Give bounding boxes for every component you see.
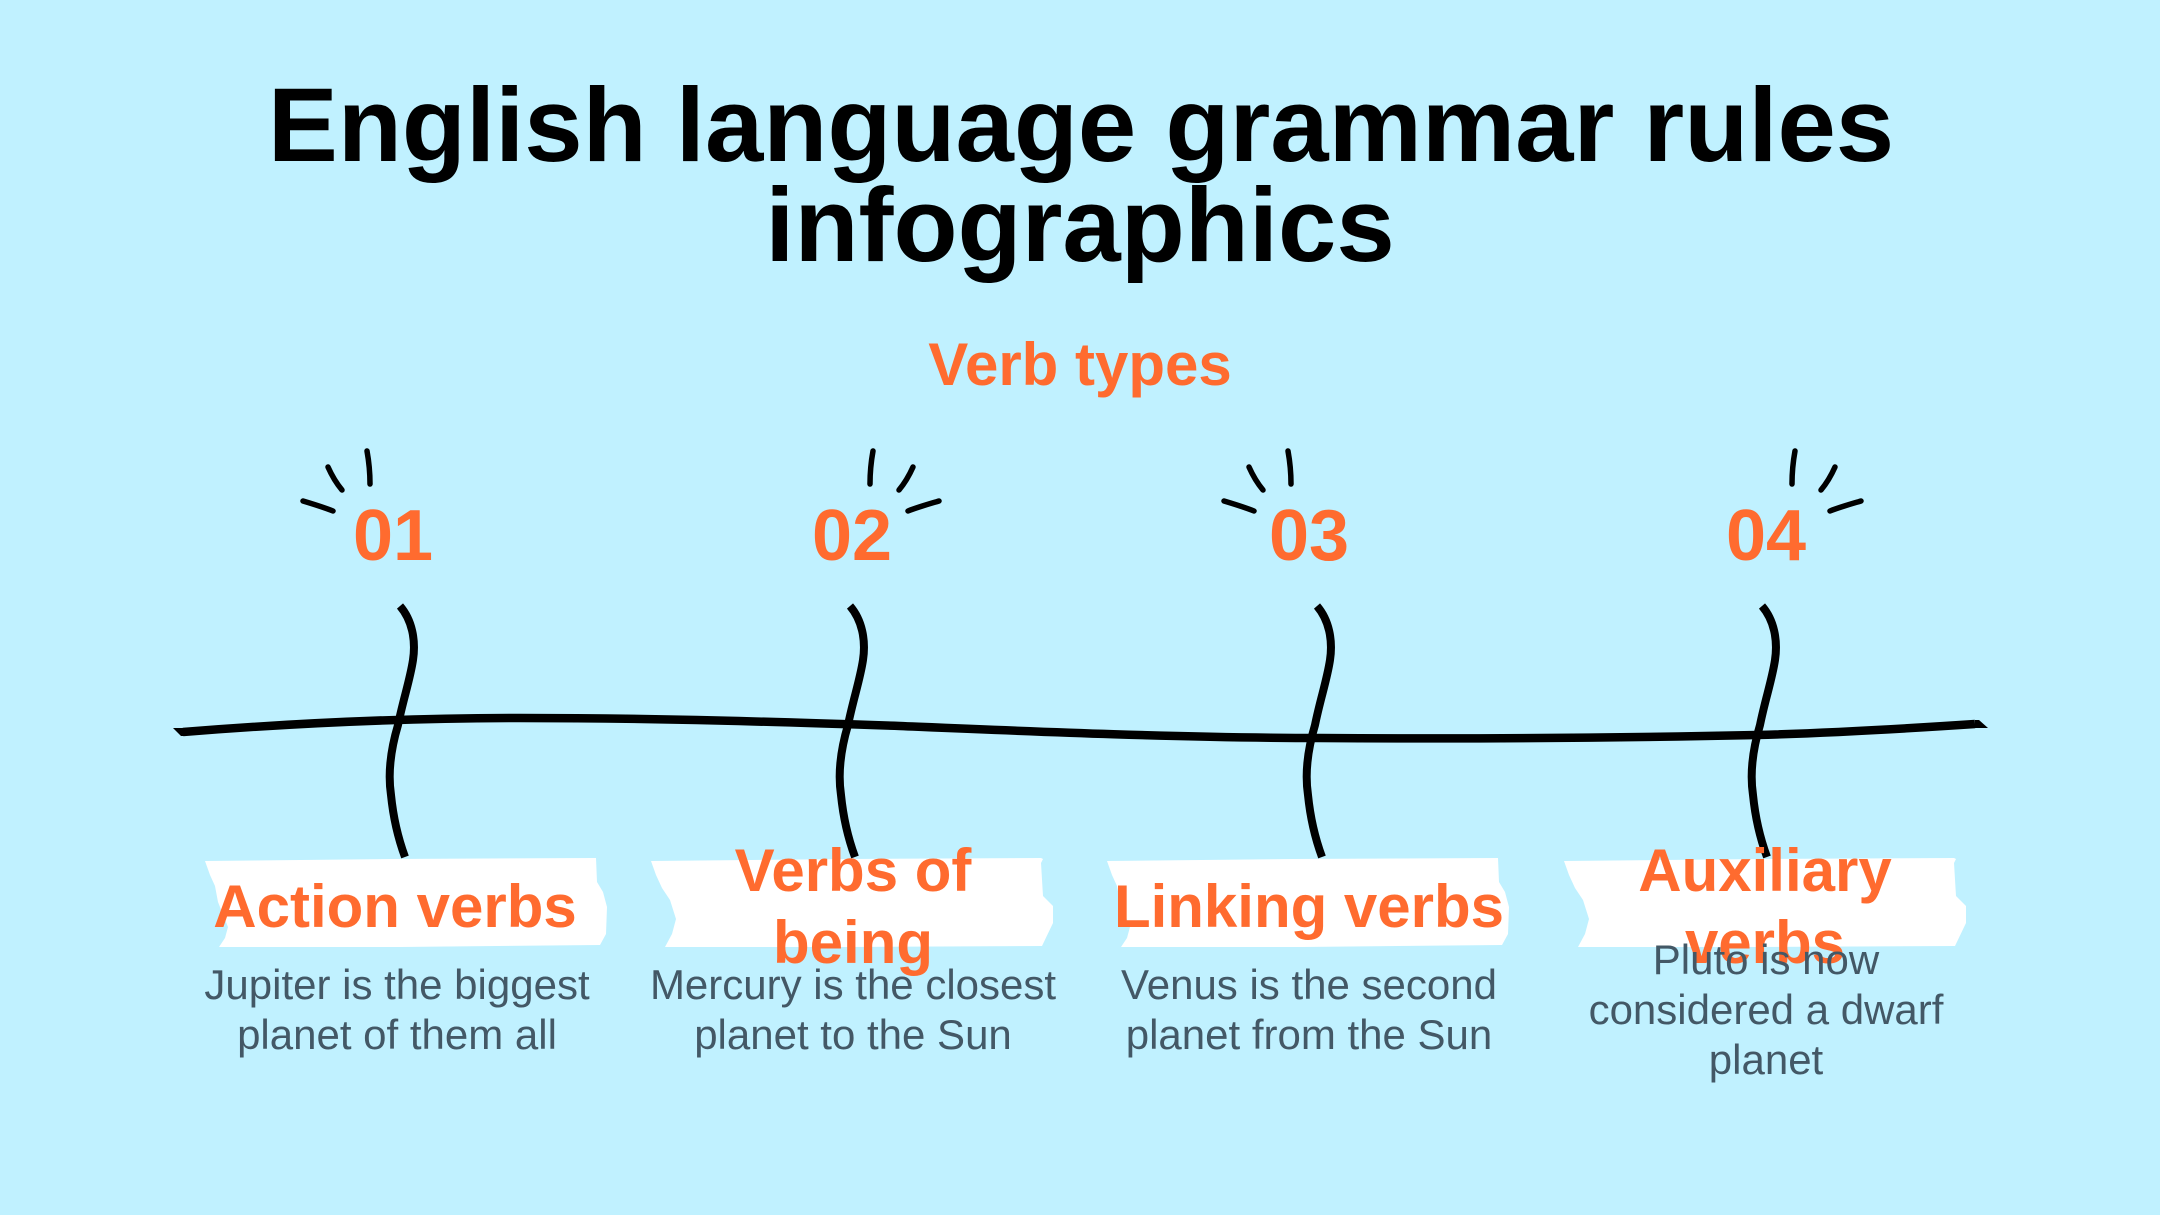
number 04: 04 — [1726, 496, 1806, 576]
number 03: 03 — [1269, 496, 1349, 576]
connector 1 — [390, 606, 414, 857]
description 1 — [204, 961, 590, 1058]
description 2: Mercury is the closest — [650, 961, 1056, 1008]
title: English language grammar rules — [268, 67, 1894, 184]
connector 2 — [840, 606, 864, 857]
heading: verbs of being — [735, 837, 972, 976]
spark lines 4 — [1792, 451, 1861, 511]
connector 4 — [1752, 606, 1776, 857]
spark lines 2 — [870, 451, 939, 511]
spark lines 1 — [303, 451, 370, 511]
description 1: Jupiter is the biggest — [204, 961, 590, 1008]
title: infographics — [765, 167, 1395, 284]
description 3 — [1121, 961, 1497, 1058]
description 4: planet — [1709, 1036, 1824, 1083]
description 4: considered a dwarf — [1589, 986, 1944, 1033]
heading: linking verbs: Linking verbs — [1114, 873, 1504, 940]
heading: auxiliary verbs: verbs — [1685, 909, 1845, 976]
heading: verbs of being: being — [773, 909, 933, 976]
column 2: verbs of being — [650, 451, 1056, 1058]
column 3: linking verbs — [1107, 451, 1509, 1058]
description 2: planet to the Sun — [694, 1011, 1012, 1058]
heading: verbs of being: Verbs of — [735, 837, 972, 904]
column 4: auxiliary verbs — [1564, 451, 1966, 1083]
description 3: planet from the Sun — [1126, 1011, 1492, 1058]
column 1: action verbs — [204, 451, 607, 1058]
heading: auxiliary verbs: Auxiliary — [1638, 837, 1892, 904]
title — [268, 67, 1894, 284]
description 1: planet of them all — [237, 1011, 557, 1058]
timeline main line — [173, 718, 1988, 738]
torn paper tape 1 — [205, 858, 607, 947]
number 01: 01 — [353, 496, 433, 576]
heading: action verbs: Action verbs — [213, 873, 577, 940]
spark lines 3 — [1224, 451, 1291, 511]
description 2 — [650, 961, 1056, 1058]
description 3: Venus is the second — [1121, 961, 1497, 1008]
torn paper tape 4 — [1564, 858, 1966, 947]
torn paper tape 2 — [651, 858, 1053, 947]
description 4 — [1589, 936, 1944, 1083]
connector 3 — [1307, 606, 1331, 857]
heading: auxiliary verbs — [1638, 837, 1892, 976]
torn paper tape 3 — [1107, 858, 1509, 947]
number 02: 02 — [812, 496, 892, 576]
description 4: Pluto is now — [1653, 936, 1880, 983]
subtitle: verb types: Verb types — [928, 331, 1232, 398]
